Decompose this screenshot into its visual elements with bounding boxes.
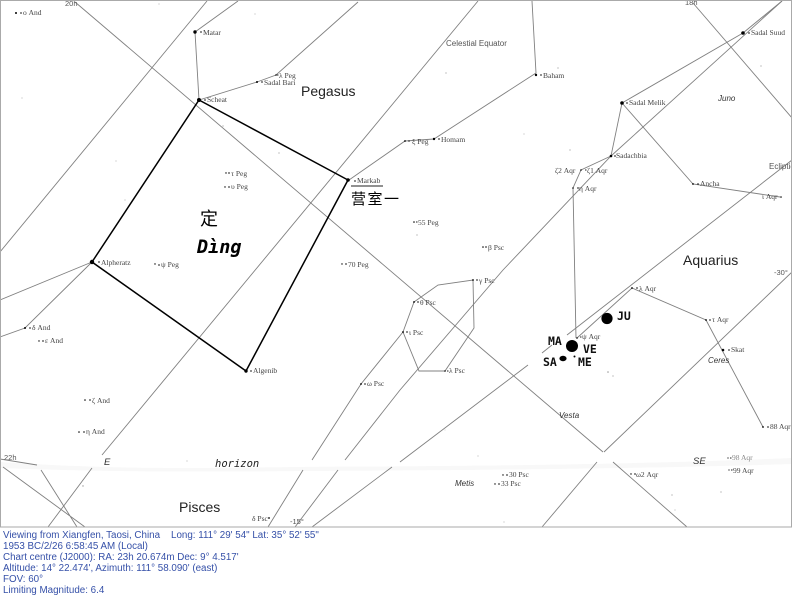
horizon label: horizon (215, 458, 259, 470)
star labels and markers: Sadachbia (616, 151, 647, 160)
star labels and markers: 88 Aqr (770, 422, 791, 431)
label: celestial equator: Celestial Equator (446, 39, 507, 48)
viewing information footer: Viewing from Xiangfen, Taosi, China (3, 530, 161, 541)
asteroid labels: Juno (717, 94, 736, 103)
star labels and markers: ι Aqr (762, 192, 778, 201)
star labels and markers: Scheat (207, 95, 228, 104)
star labels and markers: η And (86, 427, 105, 436)
coordinate labels: 22h (4, 453, 17, 462)
star labels and markers: 33 Psc (501, 479, 521, 488)
star labels and markers: ω2 Aqr (636, 470, 659, 479)
star labels and markers: Ancha (700, 179, 720, 188)
planet cluster (543, 309, 631, 369)
planet labels: MA (548, 334, 562, 348)
viewing information footer: 1953 BC/2/26 6:58:45 AM (Local) (3, 541, 148, 552)
star labels and markers: Matar (203, 28, 221, 37)
star labels and markers: γ Psc (478, 276, 495, 285)
star labels and markers: ψ Peg (161, 260, 179, 269)
star labels and markers: θ Psc (420, 298, 437, 307)
star labels and markers: η Aqr (579, 184, 597, 193)
star labels and markers: λ Aqr (639, 284, 657, 293)
star labels and markers: Sadal Melik (629, 98, 666, 107)
planet labels: VE (583, 342, 597, 356)
asteroid labels: Metis (455, 479, 474, 488)
constellation name: Pisces: Pisces (179, 499, 220, 515)
planet: Venus and Mars disc (566, 340, 578, 352)
viewing information footer: Chart centre (J2000): RA: 23h 20.674m Dec: 9° 4.517' (3, 552, 239, 563)
star labels and markers: ζ And (92, 396, 110, 405)
direction label: E: E (104, 457, 111, 468)
constellation name: Aquarius: Aquarius (683, 252, 738, 268)
star labels and markers: ι Psc (409, 328, 424, 337)
planet labels: ME (578, 355, 592, 369)
planet: Saturn disc (559, 356, 567, 361)
star labels and markers: 99 Aqr (733, 466, 754, 475)
direction label: SE: SE (693, 456, 706, 467)
star labels and markers: τ Aqr (712, 315, 729, 324)
star labels and markers: ξ Peg (412, 137, 429, 146)
asteroid labels: Ceres (708, 356, 729, 365)
star labels and markers: ω Psc (367, 379, 385, 388)
star labels and markers: ο And (23, 8, 42, 17)
planet labels: JU (617, 309, 631, 323)
Ding character label: 定 (200, 205, 218, 231)
planet: Jupiter disc (601, 313, 613, 324)
planet labels (543, 309, 631, 369)
star labels and markers: Skat (731, 345, 745, 354)
star labels and markers: ψ Aqr (582, 332, 601, 341)
asteroid labels: Vesta (559, 411, 580, 420)
star labels and markers: υ Peg (231, 182, 248, 191)
Markab Chinese label with overline: 营室一 (351, 188, 401, 209)
coordinate labels: -15° (290, 517, 304, 526)
Ding square asterism (92, 100, 348, 371)
star labels and markers: ζ2 Aqr (555, 166, 576, 175)
coordinate labels: -30° (774, 268, 788, 277)
star labels and markers: ζ1 Aqr (587, 166, 608, 175)
asteroid labels (455, 94, 736, 488)
constellation name: Pegasus: Pegasus (301, 83, 355, 99)
viewing information footer: FOV: 60° (3, 574, 43, 585)
star labels and markers: Sadal Suud (751, 28, 785, 37)
star labels and markers: τ Peg (231, 169, 247, 178)
horizon band (0, 458, 792, 472)
viewing information footer: Altitude: 14° 22.474', Azimuth: 111° 58.090' (east) (3, 563, 217, 574)
star labels and markers: λ Peg (279, 71, 296, 80)
star labels and markers: δ Psc (252, 514, 268, 523)
star labels and markers: 98 Aqr (732, 453, 753, 462)
star labels and markers: Homam (441, 135, 465, 144)
star labels and markers: Markab (357, 176, 381, 185)
planet: Mercury disc (574, 356, 576, 358)
viewing information footer: Long: 111° 29' 54" Lat: 35° 52' 55" (171, 530, 319, 541)
star labels and markers: 70 Peg (348, 260, 369, 269)
star labels and markers: Algenib (253, 366, 277, 375)
planet labels: SA (543, 355, 557, 369)
star labels and markers: ε And (45, 336, 63, 345)
star labels and markers: 55 Peg (418, 218, 439, 227)
viewing information footer: Limiting Magnitude: 6.4 (3, 585, 105, 596)
viewing information footer (3, 530, 319, 596)
star labels and markers: Alpheratz (101, 258, 131, 267)
Ding pinyin label: Dìng (196, 237, 242, 258)
star labels and markers: Sadal Bari (264, 78, 295, 87)
star labels and markers: λ Psc (449, 366, 466, 375)
ecliptic line (312, 160, 792, 527)
star labels and markers: 30 Psc (509, 470, 529, 479)
star labels and markers: δ And (32, 323, 51, 332)
star labels and markers: β Psc (488, 243, 505, 252)
star labels and markers: Baham (543, 71, 564, 80)
